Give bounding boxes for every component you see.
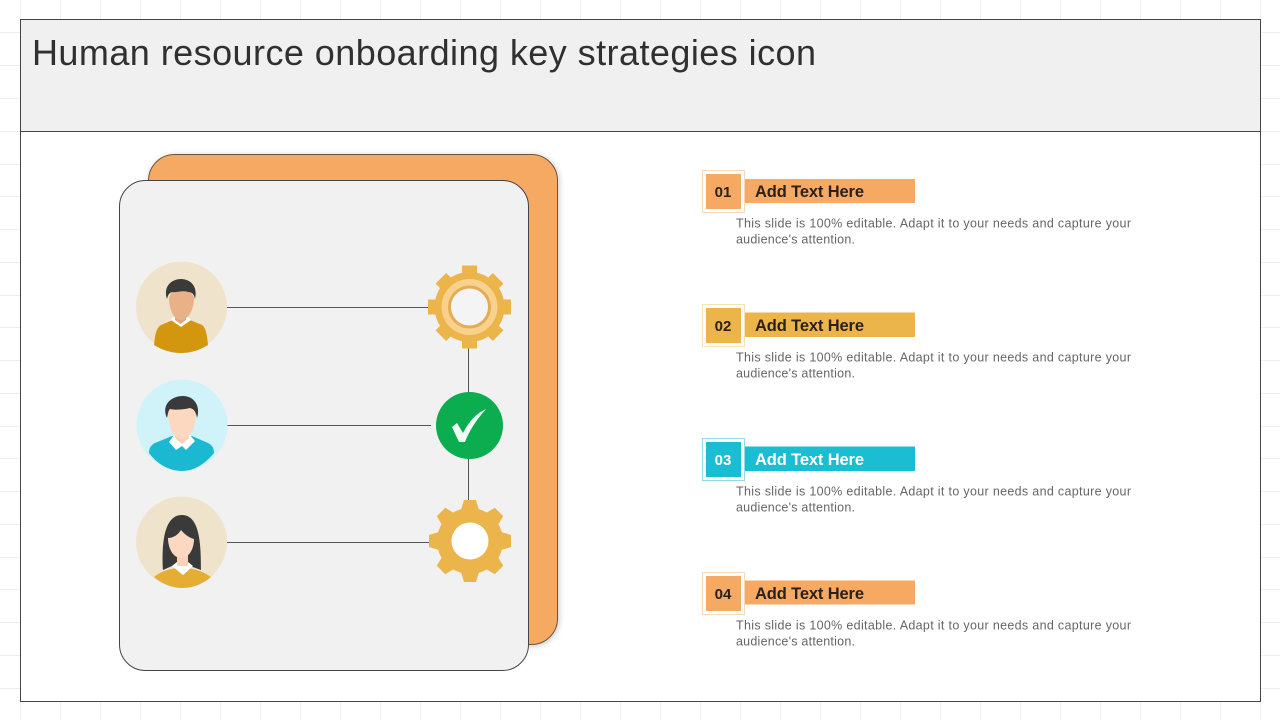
- panel: orange back card: [148, 154, 558, 644]
- number: 04: [715, 586, 732, 603]
- description: This slide is 100% editable. Adapt it to your needs and capture your: [736, 350, 1131, 364]
- icon: green check: [436, 392, 503, 459]
- heading: Add Text Here: [755, 451, 864, 469]
- heading: Add Text Here: [755, 585, 864, 603]
- description: [736, 216, 1131, 246]
- description: audience's attention.: [736, 232, 855, 246]
- title: Human resource onboarding key strategies icon: [32, 32, 816, 73]
- avatar: man in ochre sweater: [136, 262, 227, 353]
- number: 03: [715, 452, 731, 469]
- description: [736, 484, 1131, 514]
- connector lines: [226, 308, 468, 542]
- description: This slide is 100% editable. Adapt it to your needs and capture your: [736, 484, 1131, 498]
- description: This slide is 100% editable. Adapt it to your needs and capture your: [736, 618, 1131, 632]
- avatar: man in teal sweater: [136, 380, 228, 471]
- description: audience's attention.: [736, 634, 855, 648]
- avatar: woman with long hair: [136, 496, 227, 588]
- item 02: [702, 304, 1131, 380]
- number: 01: [715, 184, 731, 201]
- panel: grey front card: [120, 180, 528, 670]
- icon: ring gear: [428, 266, 511, 348]
- title band: [20, 20, 1260, 132]
- description: This slide is 100% editable. Adapt it to your needs and capture your: [736, 216, 1131, 230]
- description: [736, 350, 1131, 380]
- number: 02: [715, 318, 731, 335]
- item 04: [702, 572, 1131, 648]
- item 03: [702, 438, 1131, 514]
- description: [736, 618, 1131, 648]
- heading: Add Text Here: [755, 183, 864, 201]
- description: audience's attention.: [736, 500, 855, 514]
- description: audience's attention.: [736, 366, 855, 380]
- heading: Add Text Here: [755, 317, 864, 335]
- icon: solid gear: [412, 483, 528, 599]
- item 01: [702, 170, 1131, 246]
